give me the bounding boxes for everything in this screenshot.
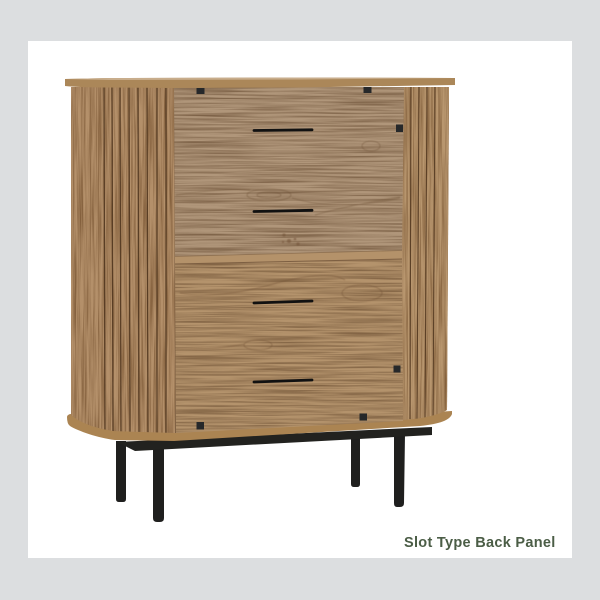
right fluted side panel xyxy=(402,87,449,420)
cabinet xyxy=(65,78,455,522)
carcass underlay xyxy=(71,87,449,433)
mounting brackets xyxy=(196,87,403,430)
flute grooves xyxy=(104,87,166,433)
upper back panel xyxy=(172,86,406,258)
white panel xyxy=(28,41,572,558)
top board xyxy=(65,78,455,88)
wood knots xyxy=(176,141,400,215)
bottom board xyxy=(67,411,452,441)
flute grooves xyxy=(410,87,435,419)
left fluted side panel xyxy=(70,86,176,434)
caption: Slot Type Back Panel xyxy=(404,535,556,551)
metal base frame xyxy=(117,427,432,451)
metal legs xyxy=(116,434,405,522)
wood knots xyxy=(176,275,382,350)
lower back panel xyxy=(172,258,406,434)
shelf between back panels xyxy=(175,250,402,264)
slots xyxy=(254,130,312,382)
